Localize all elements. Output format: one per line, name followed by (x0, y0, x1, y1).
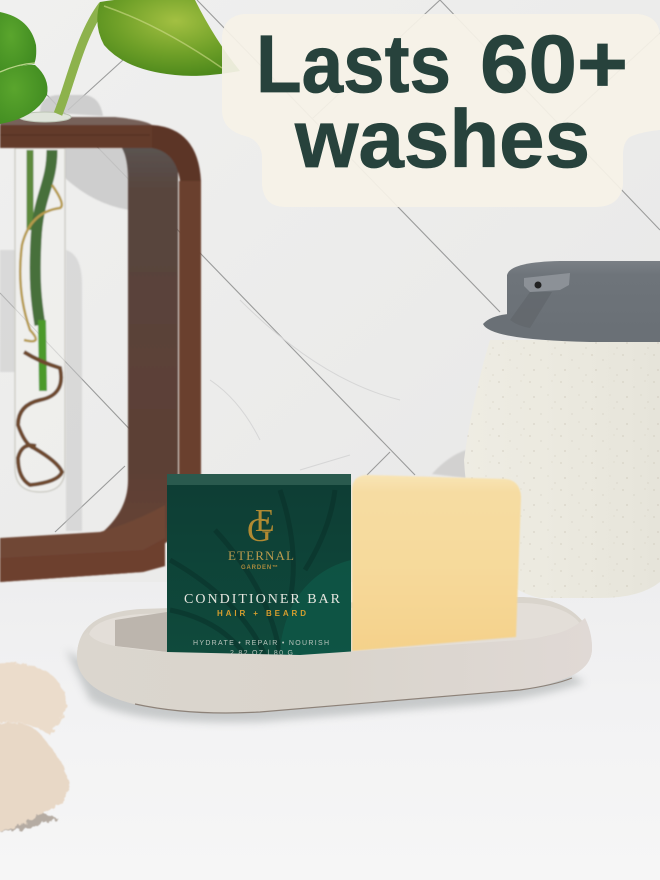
glass tube (15, 148, 65, 492)
basin shadow (115, 612, 167, 652)
roots (20, 185, 62, 341)
conditioner bar box: 2.82 OZ | 80 G (230, 650, 293, 657)
top right curve (152, 125, 201, 181)
glass vase with stems (15, 148, 65, 492)
top shelf surface (0, 117, 152, 125)
dish front lip (77, 618, 592, 713)
conditioner bar (352, 475, 521, 651)
headline: Lasts (256, 19, 451, 110)
headline (256, 19, 628, 185)
flange (483, 314, 660, 342)
conditioner bar box (167, 474, 351, 657)
box leaf pattern (170, 490, 335, 655)
headline panel (222, 14, 660, 207)
wall shadows behind stand (0, 95, 466, 531)
cap (507, 261, 660, 332)
dish shadow (66, 650, 585, 722)
upper left leaf (0, 12, 36, 72)
lower left leaf (0, 65, 48, 124)
stems (26, 150, 34, 230)
bottom shelf (0, 505, 165, 582)
vase mouth (19, 112, 71, 122)
dish basin (88, 603, 582, 655)
counter (0, 582, 660, 880)
wooden stand (0, 117, 201, 582)
stem (58, 5, 103, 114)
body (464, 340, 660, 598)
soap dish back (77, 597, 592, 713)
soap pump bottle (464, 261, 660, 598)
cap shadow (510, 292, 552, 328)
monogram: G (247, 512, 272, 549)
plant stem and leaves (0, 0, 240, 124)
product name: CONDITIONER BAR (184, 592, 341, 607)
right column (179, 181, 201, 481)
conditioner bar box: GARDEN™ (241, 564, 278, 571)
large leaf (97, 0, 240, 76)
marble wall (0, 0, 660, 600)
spout (524, 273, 570, 292)
headline: washes (294, 94, 590, 185)
top shelf front (0, 125, 152, 148)
headline: 60+ (480, 19, 628, 110)
monogram: E (255, 502, 275, 538)
inner face (70, 148, 178, 553)
sponge (0, 663, 69, 832)
benefits: HYDRATE • REPAIR • NOURISH (193, 640, 329, 647)
brand: ETERNAL (228, 548, 294, 563)
conditioner bar box: HAIR + BEARD (217, 609, 306, 618)
